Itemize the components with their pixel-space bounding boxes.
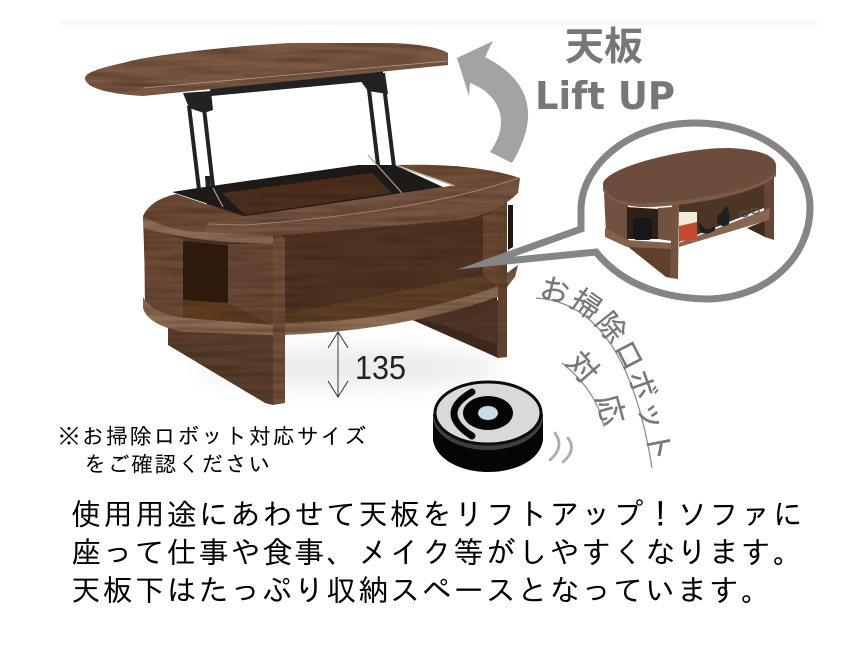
niche wall (228, 244, 274, 326)
lower shelf (284, 275, 497, 324)
mini bird figures (698, 205, 730, 234)
right far shelf (507, 265, 518, 287)
mini top edge (603, 170, 776, 207)
opening frame (172, 165, 443, 216)
mini back panel (679, 183, 764, 242)
niche floor (183, 300, 274, 326)
right post (498, 202, 507, 358)
height dimension arrow (328, 332, 348, 397)
front top strip (205, 178, 520, 236)
left lower rim (143, 297, 274, 335)
body of table (143, 165, 520, 405)
mini right post (763, 175, 774, 240)
dimension value: 135 (355, 349, 406, 386)
icon: robot vacuum (433, 382, 543, 472)
left leg (168, 328, 273, 405)
mini table photo (603, 148, 776, 279)
heading: 天板: 天板 (565, 25, 643, 70)
mini glasses (740, 208, 759, 217)
mini box (679, 212, 697, 241)
table photo: lift-top table (85, 43, 520, 405)
opening wood interior (222, 173, 392, 215)
heading: Lift UP: Lift UP (535, 74, 675, 118)
right inner wall (483, 208, 498, 287)
body backing (143, 190, 498, 340)
mini right leg (747, 220, 767, 238)
right leg (408, 297, 498, 358)
description text: 座って仕事や食事、メイク等がしやすくなります。 (71, 537, 805, 570)
left top rim (143, 216, 273, 244)
mini cup (633, 218, 652, 240)
left top surface (143, 194, 273, 244)
speech bubble (486, 123, 810, 299)
front post (273, 236, 285, 405)
mini post (670, 203, 679, 279)
mini top surface (603, 148, 776, 203)
curved label: お掃除ロボット: お掃除ロボット (542, 276, 670, 456)
floor shadow (200, 348, 500, 388)
strip highlight line (208, 166, 519, 225)
icon: sound waves (550, 433, 572, 462)
curved label: 対応 (562, 350, 626, 428)
mini shelf (679, 208, 770, 247)
mini drum (604, 193, 628, 241)
gas struts (213, 155, 402, 207)
note text (58, 424, 368, 477)
center back panel (284, 212, 490, 316)
lift arrow (457, 41, 528, 163)
lifting mechanism (183, 70, 397, 206)
mini niche wall (658, 207, 672, 241)
curved label: 対応: 対応 (564, 350, 626, 426)
mini rim (605, 228, 672, 249)
mini niche (627, 207, 658, 239)
description text (71, 499, 805, 608)
description text: 使用用途にあわせて天板をリフトアップ！ソファに (71, 499, 805, 532)
left drum (144, 226, 185, 320)
note text: をご確認ください (84, 452, 272, 477)
description text: 天板下はたっぷり収納スペースとなっています。 (71, 575, 773, 608)
slit at right (508, 205, 513, 250)
lifted top edge line (143, 61, 447, 88)
mini box print (679, 222, 697, 241)
right top surface (397, 165, 520, 186)
mini left leg (627, 246, 672, 278)
lifted table top (85, 43, 448, 96)
niche back (183, 241, 232, 303)
note text: ※お掃除ロボット対応サイズ (58, 424, 368, 449)
